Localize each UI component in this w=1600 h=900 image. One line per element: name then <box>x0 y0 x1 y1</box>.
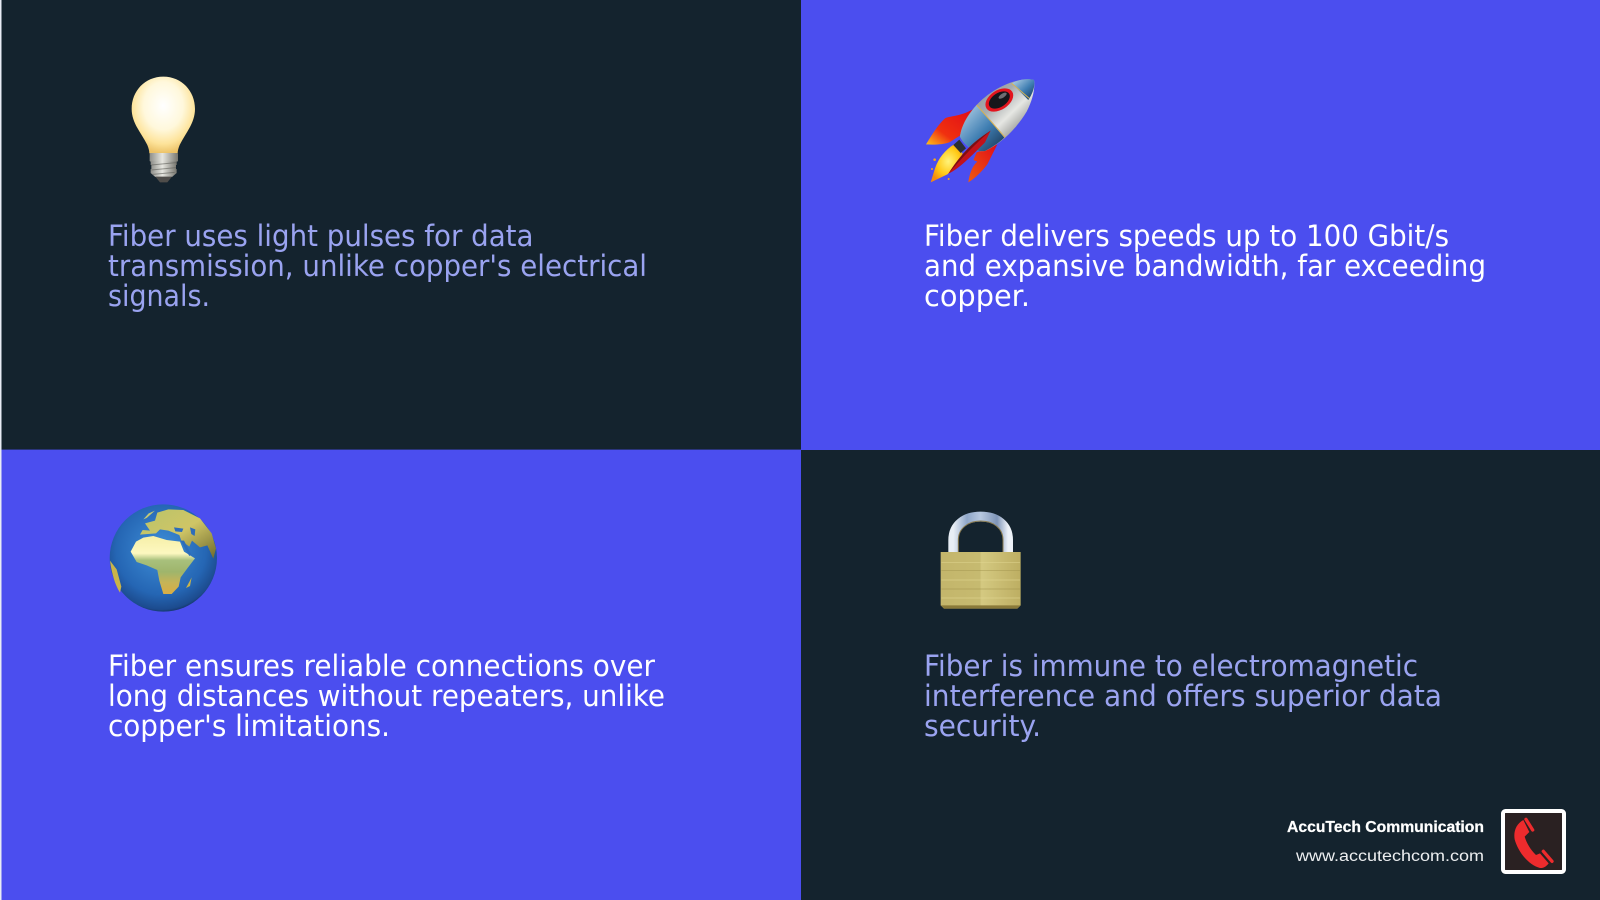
footer: brand block <box>1287 811 1564 872</box>
text: reliability: long distances without repeaters, unlike <box>108 679 665 713</box>
panel: security <box>801 450 1600 900</box>
text: reliability: copper's limitations. <box>108 709 390 743</box>
text: light pulses: signals. <box>108 279 210 313</box>
icon: red phone logo <box>1503 811 1564 872</box>
panel: speed <box>801 0 1600 450</box>
text: security <box>924 649 1442 743</box>
icon: padlock <box>941 517 1021 609</box>
text: security: Fiber is immune to electromagnetic <box>924 649 1418 683</box>
text: light pulses: Fiber uses light pulses for data <box>108 219 534 253</box>
text: speed: and expansive bandwidth, far exceeding <box>924 249 1486 283</box>
icon: rocket <box>926 79 1034 182</box>
text: speed <box>924 219 1486 313</box>
text: speed: Fiber delivers speeds up to 100 Gbit/s <box>924 219 1449 253</box>
text: speed: copper. <box>924 279 1030 313</box>
text: reliability: Fiber ensures reliable connections over <box>108 649 655 683</box>
text: security: interference and offers superior data <box>924 679 1442 713</box>
panel: reliability <box>2 450 801 900</box>
text: reliability <box>108 649 665 743</box>
text: light pulses: transmission, unlike copper's electrical <box>108 249 647 283</box>
icon: light bulb <box>132 77 195 182</box>
company name: AccuTech Communication <box>1287 819 1484 836</box>
text: security: security. <box>924 709 1041 743</box>
icon: globe <box>110 504 217 612</box>
panel: light pulses <box>2 0 801 450</box>
website url: www.accutechcom.com <box>1295 848 1484 865</box>
text: light pulses <box>108 219 647 313</box>
